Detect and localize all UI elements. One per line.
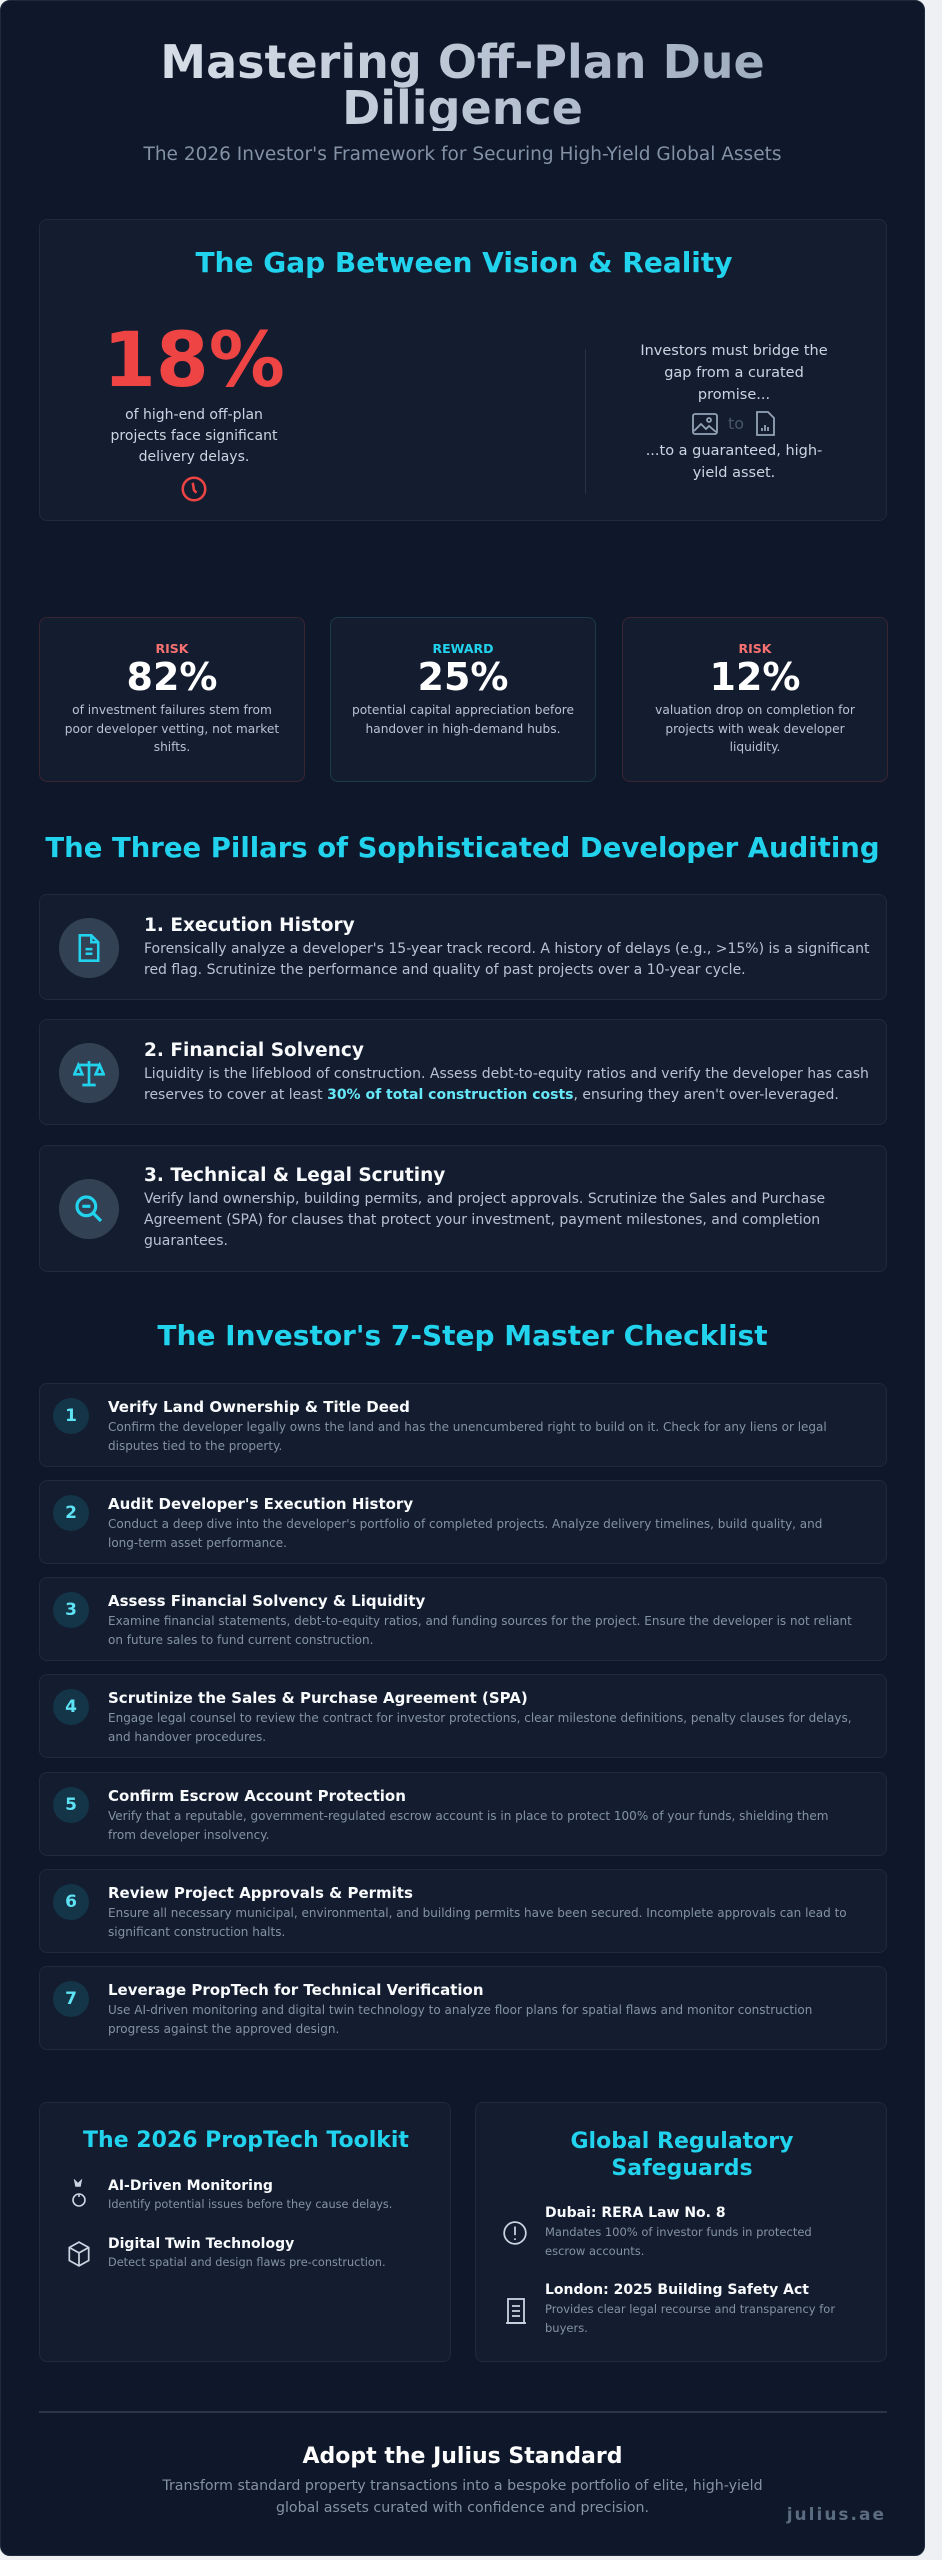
checklist step 6: Review Project Approvals & Permits — [108, 1884, 413, 1902]
item: London safety act: London: 2025 Building Safety Act — [545, 2282, 809, 2298]
item: Dubai RERA — [503, 2205, 812, 2258]
checklist step 4: Engage legal counsel to review the contract for investor protections, clear milestone definitions, penalty clauses for delays, and handover procedures. — [108, 1711, 852, 1744]
text: bridge the gap: ...to a guaranteed, high-yield asset. — [646, 443, 822, 481]
item: AI monitoring: Identify potential issues before they cause delays. — [108, 2198, 392, 2211]
stat card: risk 82% — [39, 617, 305, 782]
title: Mastering Off-Plan Due — [160, 35, 765, 89]
heading: three pillars: The Three Pillars of Sophisticated Developer Auditing — [45, 832, 880, 864]
checklist step 5: 5 — [65, 1795, 77, 1815]
stat card: risk 12% — [622, 617, 888, 782]
stat card: risk 12%: 12% — [710, 655, 800, 699]
stat card: risk 82%: RISK — [156, 641, 188, 656]
checklist step 4: 4 — [65, 1697, 77, 1717]
checklist step 3: Examine financial statements, debt-to-equity ratios, and funding sources for the project. Ensure the developer is not reliant on future sales to fund current construction. — [108, 1614, 852, 1647]
checklist step 4: Scrutinize the Sales & Purchase Agreement (SPA) — [108, 1689, 528, 1707]
checklist step 6: 6 — [65, 1892, 77, 1912]
stat card: reward 25%: REWARD — [432, 641, 494, 656]
heading: checklist: The Investor's 7-Step Master Checklist — [157, 1319, 768, 1352]
item: Dubai RERA: Dubai: RERA Law No. 8 — [545, 2205, 726, 2221]
checklist step 7 — [39, 1966, 887, 2050]
checklist step 2 — [39, 1480, 887, 1564]
heading: gap: The Gap Between Vision & Reality — [195, 246, 733, 279]
checklist step 5: Verify that a reputable, government-regulated escrow account is in place to protect 100% of your funds, shielding them from developer insolvency. — [108, 1809, 828, 1842]
pillar 3: Verify land ownership, building permits, and project approvals. Scrutinize the Sales and Purchase Agreement (SPA) for clauses that protect your investment, payment milestones, and completion guarantees. — [144, 1191, 825, 1249]
pillar 1: Forensically analyze a developer's 15-year track record. A history of delays (e.g., >15%) is a significant red flag. Scrutinize the performance and quality of past projects over a 10-year cycle. — [144, 941, 869, 978]
item: digital twin: Digital Twin Technology — [108, 2236, 294, 2252]
stat card: risk 82%: 82% — [127, 655, 217, 699]
stat: 18%: 18% — [103, 315, 285, 404]
icon: scales — [59, 1043, 119, 1103]
text: bridge the gap: Investors must bridge the gap from a curated promise... — [640, 343, 828, 403]
checklist step 3 — [39, 1577, 887, 1661]
checklist step 3: Assess Financial Solvency & Liquidity — [108, 1592, 425, 1610]
title: Diligence — [342, 81, 583, 135]
stat: 18% — [103, 315, 285, 502]
item: digital twin: Detect spatial and design flaws pre-construction. — [108, 2256, 386, 2269]
icon: clock — [182, 476, 206, 502]
stat: 18%: of high-end off-plan — [125, 407, 263, 423]
pillar 1 — [39, 894, 887, 1000]
panel: proptech toolkit — [39, 2102, 451, 2362]
stat card: reward 25%: 25% — [418, 655, 508, 699]
pillar 2: 2. Financial Solvency — [144, 1040, 364, 1061]
footer: adopt the julius standard — [162, 2444, 763, 2516]
stat: 18%: projects face significant — [111, 428, 277, 444]
icons: image to document — [692, 411, 775, 436]
checklist step 5 — [39, 1772, 887, 1856]
title — [30, 39, 895, 131]
checklist step 7: 7 — [65, 1989, 77, 2009]
checklist step 7: Use AI-driven monitoring and digital twin technology to analyze floor plans for spatial flaws and monitor construction progress against the approved design. — [108, 2003, 812, 2036]
checklist step 3: 3 — [65, 1600, 77, 1620]
panel: regulatory safeguards — [475, 2102, 887, 2362]
item: digital twin — [68, 2236, 386, 2269]
heading: regulatory — [570, 2129, 794, 2181]
icon: search — [59, 1179, 119, 1239]
checklist step 1: Confirm the developer legally owns the land and has the unencumbered right to build on it. Check for any liens or legal disputes tied to the property. — [108, 1420, 827, 1453]
pillar 3: 3. Technical & Legal Scrutiny — [144, 1165, 445, 1186]
checklist step 6: Ensure all necessary municipal, environmental, and building permits have been secured. Incomplete approvals can lead to significant construction halts. — [108, 1906, 847, 1939]
item: London safety act: Provides clear legal recourse and transparency for buyers. — [545, 2302, 835, 2335]
checklist step 5: Confirm Escrow Account Protection — [108, 1787, 406, 1805]
panel: gap between vision and reality — [39, 219, 887, 521]
checklist step 4 — [39, 1674, 887, 1758]
item: London safety act — [506, 2282, 836, 2335]
icons: image to document: to — [728, 414, 744, 433]
subtitle: The 2026 Investor's Framework for Securing High-Yield Global Assets — [144, 144, 781, 165]
stat card: risk 12%: valuation drop on completion for projects with weak developer liquidity. — [655, 703, 855, 754]
checklist step 1: 1 — [65, 1406, 77, 1426]
brand: julius.ae: julius.ae — [787, 2505, 886, 2525]
checklist step 2: Audit Developer's Execution History — [108, 1495, 413, 1513]
checklist step 2: 2 — [65, 1503, 77, 1523]
text: bridge the gap — [640, 343, 828, 481]
checklist step 1 — [39, 1383, 887, 1467]
item: Dubai RERA: Mandates 100% of investor funds in protected escrow accounts. — [545, 2225, 812, 2258]
checklist step 1: Verify Land Ownership & Title Deed — [108, 1398, 410, 1416]
footer: adopt the julius standard: Adopt the Julius Standard — [302, 2444, 622, 2469]
stat card: risk 82%: of investment failures stem from poor developer vetting, not market shifts. — [65, 703, 279, 754]
stat card: reward 25% — [330, 617, 596, 782]
icon: document — [59, 918, 119, 978]
pillar 2: Liquidity is the lifeblood of construction. Assess debt-to-equity ratios and verify the developer has cash reserves to cover at least 30% of total construction costs, ensuring they aren't over-leveraged. — [144, 1066, 869, 1103]
checklist step 2: Conduct a deep dive into the developer's portfolio of completed projects. Analyze delivery timelines, build quality, and long-term asset performance. — [108, 1517, 822, 1550]
pillar 2 — [39, 1019, 887, 1125]
pillar 1: 1. Execution History — [144, 915, 355, 936]
heading: toolkit: The 2026 PropTech Toolkit — [83, 2128, 409, 2153]
heading: regulatory: Global Regulatory — [570, 2129, 794, 2154]
stat: 18%: delivery delays. — [139, 449, 249, 465]
stat card: reward 25%: potential capital appreciation before handover in high-demand hubs. — [352, 703, 574, 736]
footer: adopt the julius standard: Transform standard property transactions into a bespoke portfolio of elite, high-yield global assets curated with confidence and precision. — [162, 2478, 763, 2516]
pillar 3 — [39, 1145, 887, 1272]
heading: regulatory: Safeguards — [611, 2156, 753, 2181]
item: AI monitoring — [72, 2178, 392, 2211]
stat card: risk 12%: RISK — [739, 641, 771, 656]
checklist step 6 — [39, 1869, 887, 1953]
checklist step 7: Leverage PropTech for Technical Verification — [108, 1981, 484, 1999]
item: AI monitoring: AI-Driven Monitoring — [108, 2178, 273, 2194]
